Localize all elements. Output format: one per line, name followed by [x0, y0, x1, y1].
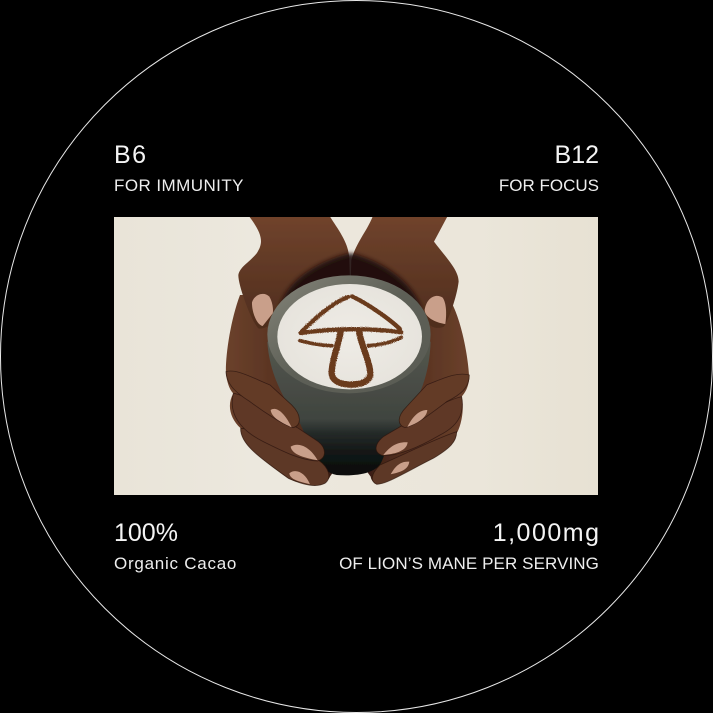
stat label: of lion's mane per serving: OF LION’S MANE PER SERVING: [339, 554, 599, 573]
stat: 1,000mg of lion's mane per serving: [339, 519, 600, 573]
right finger two: [376, 397, 462, 456]
stat: 100% organic cacao: [114, 519, 237, 573]
cup rim: [267, 275, 431, 393]
stat label: organic cacao: Organic Cacao: [114, 554, 237, 573]
photo background: [114, 217, 598, 495]
latte foam: [277, 284, 422, 389]
top right hand: [351, 217, 459, 328]
stat value: B12: B12: [555, 141, 599, 169]
mushroom latte art: [300, 296, 401, 385]
right finger three: [372, 432, 457, 484]
stat: B12 for focus: [499, 141, 599, 195]
cup body: [267, 342, 431, 475]
left finger one: [226, 371, 299, 428]
stat value: 100%: 100%: [114, 519, 178, 547]
top left hand: [238, 217, 350, 329]
left finger three: [241, 428, 329, 486]
stat label: for focus: FOR FOCUS: [499, 176, 599, 195]
stat value: 1,000mg: 1,000mg: [493, 519, 600, 547]
right hand silhouette: [350, 295, 469, 483]
fingernails: [252, 294, 446, 484]
left finger two: [232, 393, 324, 461]
left hand silhouette: [226, 295, 350, 484]
photo: hands holding cup with mushroom latte art: [114, 217, 598, 495]
stat: B6 for immunity: [114, 141, 244, 195]
inner hand shadow: [280, 253, 422, 310]
right finger one: [399, 374, 469, 428]
stat value: B6: B6: [114, 141, 148, 169]
stat label: for immunity: FOR IMMUNITY: [114, 176, 244, 195]
